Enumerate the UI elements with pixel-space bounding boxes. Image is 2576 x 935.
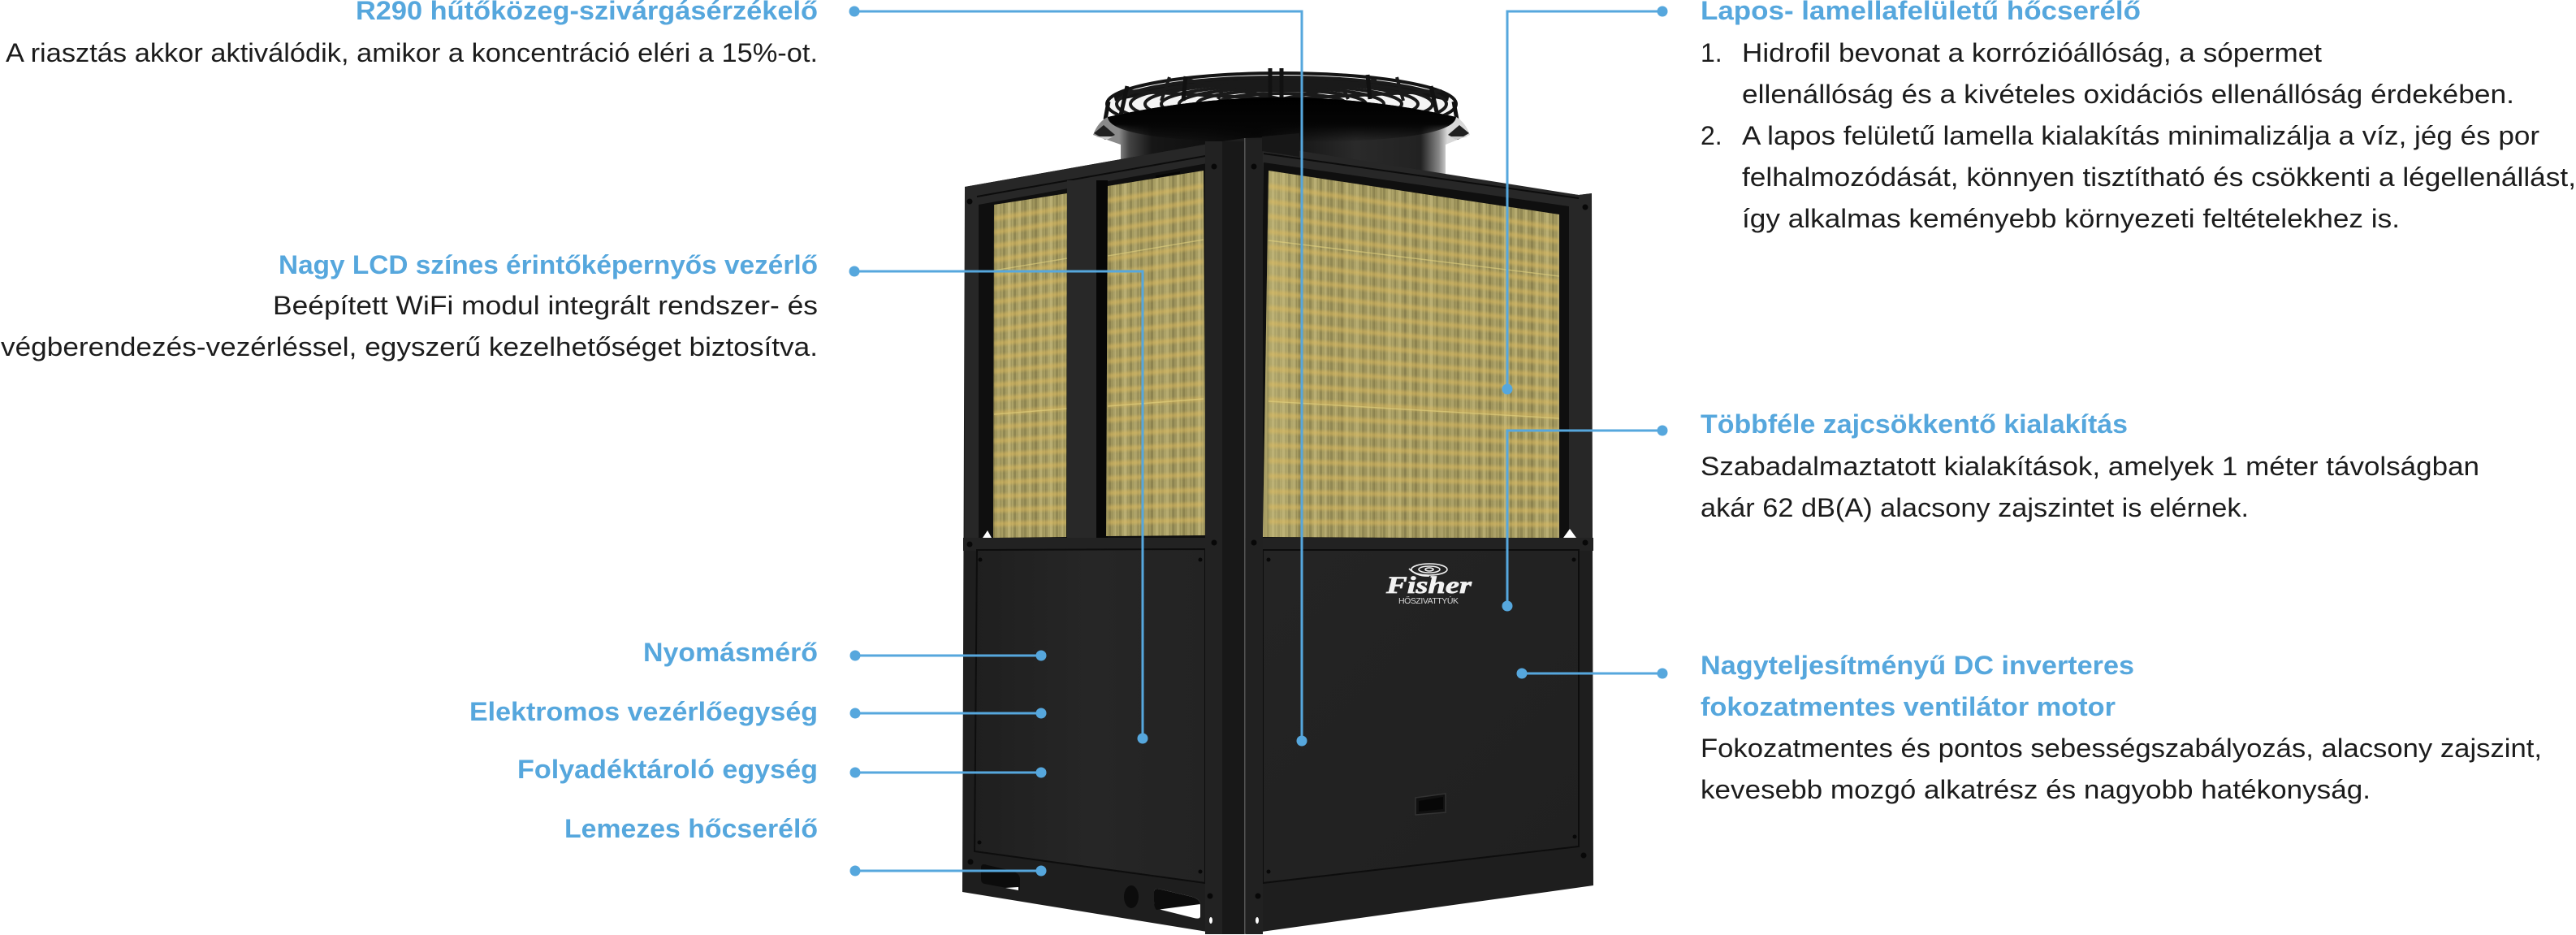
cabinet body [962, 136, 1593, 934]
callout: R290 leak sensor [6, 0, 1307, 746]
numbered list: A lapos felületű lamella kialakítás minimalizálja a víz, jég és por [1742, 121, 2539, 150]
lower panel left [975, 549, 1205, 883]
logo: Fisher: HŐSZIVATTYÚK [1398, 595, 1459, 606]
fan hood [1093, 97, 1470, 184]
numbered list: Hidrofil bevonat a korrózióállóság, a sópermet [1742, 38, 2322, 67]
description [1701, 452, 2479, 522]
logo: Fisher [1385, 564, 1472, 606]
callout: liquid receiver [517, 755, 1046, 784]
logo: Fisher: Fisher [1385, 572, 1472, 599]
callout: pressure gauge: Nyomásmérő [643, 638, 818, 667]
callout: pressure gauge [643, 638, 1046, 667]
description: Szabadalmaztatott kialakítások, amelyek 1 méter távolságban [1701, 452, 2479, 481]
numbered list: 2. [1701, 121, 1722, 150]
corner post [1205, 133, 1299, 934]
callout: flat fin heat exchanger [1502, 0, 2576, 395]
callout: liquid receiver: Folyadéktároló egység [517, 755, 818, 784]
description: Beépített WiFi modul integrált rendszer- és [273, 291, 818, 320]
description: Fokozatmentes és pontos sebességszabályozás, alacsony zajszint, [1701, 734, 2542, 763]
numbered list: felhalmozódását, könnyen tisztítható és csökkenti a légellenállást, [1742, 162, 2576, 192]
leader line [849, 266, 1148, 744]
heading [1701, 651, 2134, 721]
callout: noise reduction [1502, 409, 2479, 611]
fan grille [1105, 68, 1457, 135]
description: kevesebb mozgó alkatrész és nagyobb hatékonyság. [1701, 775, 2371, 804]
heading: Nagy LCD színes érintőképernyős vezérlő [279, 250, 818, 279]
description: végberendezés-vezérléssel, egyszerű kezelhetőséget biztosítva. [1, 332, 818, 361]
base openings [981, 864, 1259, 924]
coil right [1259, 167, 1563, 542]
lower frame band [963, 538, 1593, 551]
coil middle [1106, 171, 1205, 536]
numbered list: 1. [1701, 38, 1722, 67]
frame bolts [966, 164, 1588, 898]
numbered list: ellenállóság és a kivételes oxidációs ellenállóság érdekében. [1742, 80, 2514, 109]
callout: LCD controller [1, 250, 1148, 744]
description: A riasztás akkor aktiválódik, amikor a koncentráció eléri a 15%-ot. [6, 38, 818, 67]
coil corner notches [983, 529, 1576, 538]
leader line [1517, 668, 1668, 679]
callout: plate heat exchanger [564, 814, 1046, 876]
heading: Többféle zajcsökkentő kialakítás [1701, 409, 2128, 439]
heading: Nagyteljesítményű DC inverteres [1701, 651, 2134, 680]
heat pump unit [962, 68, 1593, 934]
description [1701, 734, 2542, 804]
service handle [1416, 794, 1446, 815]
upper frame [965, 141, 1592, 552]
callout: DC inverter fan motor [1517, 651, 2542, 804]
callout: electric control unit [469, 697, 1046, 726]
numbered list: így alkalmas keményebb környezeti feltételekhez is. [1742, 204, 2400, 233]
leader line [849, 6, 1307, 746]
coil far left [993, 193, 1067, 538]
numbered list [1701, 38, 2576, 233]
leader line [1502, 426, 1668, 611]
lower panel right [1263, 550, 1579, 883]
heading: fokozatmentes ventilátor motor [1701, 692, 2116, 721]
leader line [1502, 6, 1668, 395]
callout: electric control unit: Elektromos vezérlőegység [469, 697, 818, 726]
description: akár 62 dB(A) alacsony zajszintet is elérnek. [1701, 493, 2249, 522]
description [1, 291, 818, 361]
callout: plate heat exchanger: Lemezes hőcserélő [564, 814, 818, 843]
